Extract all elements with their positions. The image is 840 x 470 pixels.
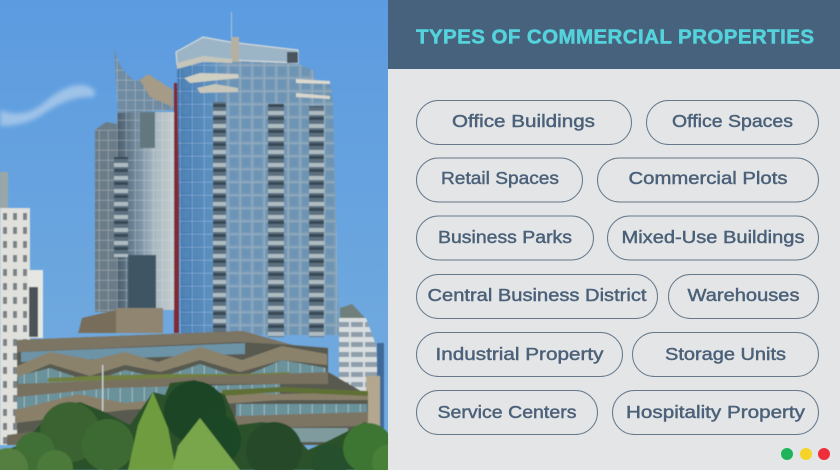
podium top box (78, 310, 117, 334)
main tower (176, 12, 339, 337)
trees (0, 380, 408, 470)
planted ledge and mid band (48, 372, 290, 382)
red strip (174, 83, 179, 333)
traffic-light dots (781, 448, 830, 460)
roof slab and balconies (177, 56, 232, 69)
pill: Business Parks (416, 216, 594, 260)
title banner (388, 0, 840, 69)
curved tower with spire (114, 47, 174, 310)
pill: Retail Spaces: Retail Spaces (441, 168, 559, 188)
pill: Office Spaces (646, 100, 818, 144)
photo: commercial high-rise buildings against blue sky (0, 0, 408, 470)
right panel background (388, 0, 840, 470)
pill: Office Spaces: Office Spaces (672, 111, 793, 131)
sky (0, 0, 388, 470)
sawtooth tier (17, 346, 327, 378)
far left tower (95, 122, 117, 312)
upper glass band (21, 343, 245, 362)
pill: Commercial Plots: Commercial Plots (628, 168, 788, 188)
pill: Industrial Property: Industrial Property (436, 344, 604, 364)
property type pills (416, 100, 818, 434)
right building (339, 304, 384, 433)
balcony columns (213, 102, 226, 337)
pill: Business Parks: Business Parks (438, 227, 572, 247)
mid glass band (17, 384, 280, 410)
pill: Service Centers: Service Centers (438, 402, 577, 422)
pill: Service Centers (416, 390, 598, 434)
pill: Warehouses: Warehouses (688, 285, 800, 305)
lamp post (102, 365, 103, 470)
title: TYPES OF COMMERCIAL PROPERTIES (416, 26, 814, 48)
pill: Central Business District: Central Business District (428, 285, 647, 305)
pill: Industrial Property (416, 332, 622, 376)
podium terraced building (7, 331, 368, 445)
lower concrete tiers (15, 392, 368, 423)
pill: Hospitality Property: Hospitality Property (626, 402, 805, 422)
pill: Office Buildings (416, 100, 632, 144)
white tower left (0, 172, 43, 445)
top slab (17, 331, 292, 352)
roof penthouse (176, 37, 298, 65)
pill: Central Business District (416, 274, 658, 318)
pill: Storage Units (632, 332, 818, 376)
pill: Mixed-Use Buildings: Mixed-Use Buildings (622, 227, 805, 247)
pill: Mixed-Use Buildings (608, 216, 818, 260)
pill: Hospitality Property (612, 390, 818, 434)
pill: Commercial Plots (598, 158, 818, 202)
pill: Warehouses (668, 274, 818, 318)
pill: Retail Spaces (416, 158, 582, 202)
cloud (0, 85, 95, 126)
pill: Storage Units: Storage Units (665, 344, 786, 364)
pill: Office Buildings: Office Buildings (452, 111, 595, 131)
